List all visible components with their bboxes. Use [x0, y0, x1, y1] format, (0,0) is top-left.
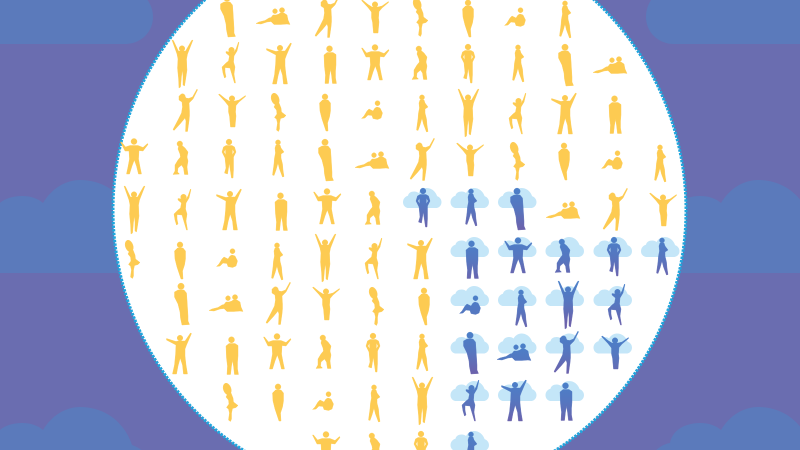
row 4: [120, 138, 666, 182]
figure: hands on hips: [607, 237, 621, 276]
figure: big man: [220, 0, 236, 37]
small clouds: [403, 188, 679, 450]
figure: jumping: [608, 284, 625, 325]
cloud: bottom right: [646, 407, 800, 450]
people in the cloud: [403, 188, 679, 450]
figure: shrugging man: [504, 238, 532, 273]
figure: couple: [546, 202, 580, 218]
row 3: [173, 89, 622, 137]
figure: crouching: [316, 335, 331, 368]
figure: sitting: [504, 8, 526, 26]
figure: big man: [318, 139, 334, 181]
figure: waving man: [552, 93, 576, 134]
figure: jumping: [222, 42, 239, 83]
figure: sitting: [602, 151, 622, 170]
figure: arms up: [458, 89, 479, 137]
figure: curly hair woman: [124, 239, 140, 278]
figure: couple: [355, 152, 389, 168]
figure: arms spread: [602, 336, 628, 369]
figure: standing man: [324, 46, 336, 84]
cloud: top left: [0, 0, 153, 44]
figure: leaping woman: [266, 282, 290, 324]
figure: waving man: [502, 380, 526, 421]
row 8 clouds: [450, 334, 632, 353]
row 6 clouds: [450, 237, 679, 257]
figure: arms up: [412, 377, 433, 425]
figure: waving man: [266, 43, 292, 84]
figure: arms up: [315, 234, 336, 282]
row 10 cloud: [450, 431, 489, 450]
white circle panel with scalloped edge: [113, 0, 686, 450]
figure: curly hair woman: [412, 0, 428, 36]
figure: arms up: [124, 186, 145, 234]
figure: arms up: [558, 281, 579, 329]
figure: standing man: [609, 96, 622, 134]
figure: big man: [174, 283, 190, 325]
figure: woman: [560, 1, 571, 38]
figure: couple: [497, 344, 531, 360]
figure: woman: [466, 189, 477, 226]
figure: jumping: [462, 380, 479, 421]
figure: leaping woman: [173, 89, 198, 132]
figure: arms spread: [650, 193, 676, 226]
row 5: [124, 186, 676, 234]
figure: crouching: [365, 433, 380, 450]
figure: woman: [416, 95, 428, 132]
figure: arms spread: [362, 0, 388, 33]
figure: shrugging man: [314, 188, 341, 224]
figure: curly hair woman: [368, 286, 384, 326]
figure: crouching: [365, 191, 380, 224]
row 9 clouds: [450, 381, 584, 401]
figure: arms up: [172, 40, 193, 88]
figure: woman: [272, 140, 284, 177]
figure: leaping woman: [315, 0, 340, 38]
figure: couple: [593, 57, 627, 74]
figure: big man: [510, 188, 526, 230]
figure: sitting: [362, 101, 382, 120]
figure: arms spread: [312, 287, 340, 320]
figure: jumping: [509, 93, 526, 134]
figure: crouching: [412, 46, 427, 80]
figure: leaning man: [174, 242, 186, 279]
figure: sitting: [312, 392, 334, 410]
figure: crouching: [173, 141, 188, 174]
row 1: [220, 0, 571, 38]
row 2: [172, 40, 627, 88]
figure: curly hair woman: [509, 141, 525, 180]
figure: woman: [516, 290, 527, 327]
figure: standing man: [226, 337, 238, 374]
cloud: middle left: [0, 180, 153, 273]
figure: woman: [416, 334, 428, 371]
row 6: [124, 234, 433, 282]
figure: hands on hips: [366, 333, 380, 372]
figure: couple: [209, 295, 243, 312]
cloud: middle right: [646, 180, 800, 273]
figure: leaping woman: [410, 138, 434, 180]
figure: arms spread: [218, 94, 246, 127]
figure: waving man: [216, 189, 242, 230]
figure: leaping woman: [554, 331, 578, 374]
figure: leaning man: [320, 94, 330, 131]
figure: big man: [464, 332, 478, 374]
figure: hands on hips: [461, 44, 475, 83]
figure: curly hair woman: [222, 382, 238, 422]
figure: sitting: [460, 296, 480, 314]
figure: curly hair woman: [270, 92, 286, 132]
yellow people: [120, 0, 676, 450]
figure: leaping woman: [603, 188, 628, 230]
figure: waving man: [408, 238, 432, 279]
figure: hands on hips: [414, 431, 428, 450]
figure: crouching: [555, 239, 570, 272]
row 9: [222, 377, 433, 425]
figure: woman: [512, 45, 524, 82]
figure: woman: [466, 432, 477, 450]
figure: couple: [256, 8, 290, 24]
figure: shrugging man: [312, 432, 340, 450]
figure: arms spread: [456, 143, 484, 176]
people grid: [120, 0, 679, 450]
figure: sitting: [216, 249, 238, 268]
row 10: [312, 431, 428, 450]
figure: woman: [654, 145, 666, 182]
figure: standing man: [275, 193, 288, 230]
figure: jumping: [365, 238, 382, 279]
figure: standing man: [560, 383, 572, 420]
figure: woman: [368, 385, 380, 422]
figure: woman: [656, 238, 668, 275]
figure: big man: [558, 44, 574, 86]
figure: waving man: [166, 333, 192, 374]
row 5 clouds: [403, 188, 536, 208]
blue people: [416, 188, 668, 450]
figure: jumping: [174, 189, 191, 230]
row 8: [166, 333, 428, 374]
figure: shrugging man: [120, 138, 148, 174]
figure: standing man: [466, 241, 478, 278]
figure: leaning man: [462, 0, 474, 37]
figure: hands on hips: [416, 188, 430, 227]
cloud: bottom left: [0, 407, 153, 450]
figure: shrugging man: [362, 44, 389, 80]
row 7: [174, 282, 430, 326]
cloud: top right: [646, 0, 800, 44]
figure: leaning man: [418, 288, 430, 325]
row 7 clouds: [450, 286, 632, 306]
figure: leaning man: [272, 384, 284, 421]
figure: hands on hips: [222, 139, 236, 178]
figure: shrugging man: [264, 334, 291, 369]
figure: leaning man: [558, 143, 570, 180]
figure: woman: [272, 243, 283, 280]
